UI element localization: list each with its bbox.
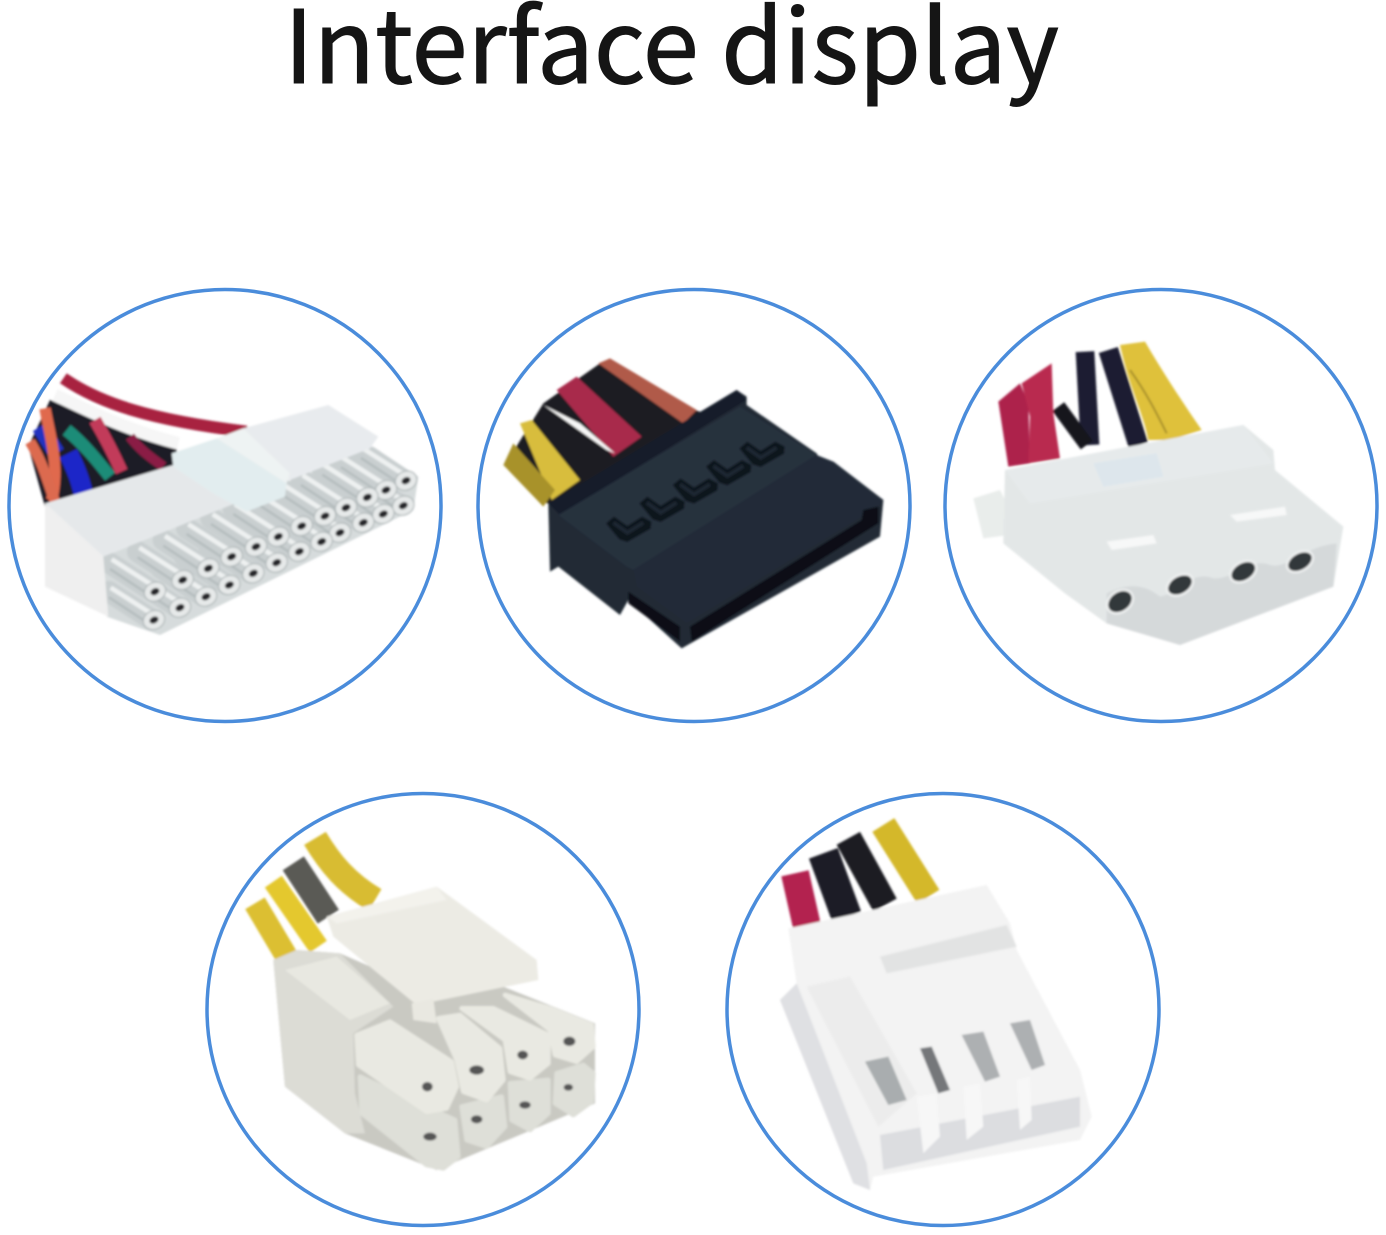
circle: 24-pin ATX connector [9, 290, 441, 722]
photo: SATA connector [503, 358, 883, 648]
circle: SATA power connector [478, 290, 910, 722]
photo: Molex connector [973, 342, 1343, 645]
circle: floppy 4-pin connector [727, 794, 1159, 1226]
photo: 24-pin connector [28, 378, 420, 635]
circle: Molex 4-pin connector [945, 290, 1377, 722]
photo: 8-pin connector [255, 838, 595, 1170]
circle: 8-pin EPS connector [207, 794, 639, 1226]
photo: floppy connector [780, 825, 1092, 1190]
